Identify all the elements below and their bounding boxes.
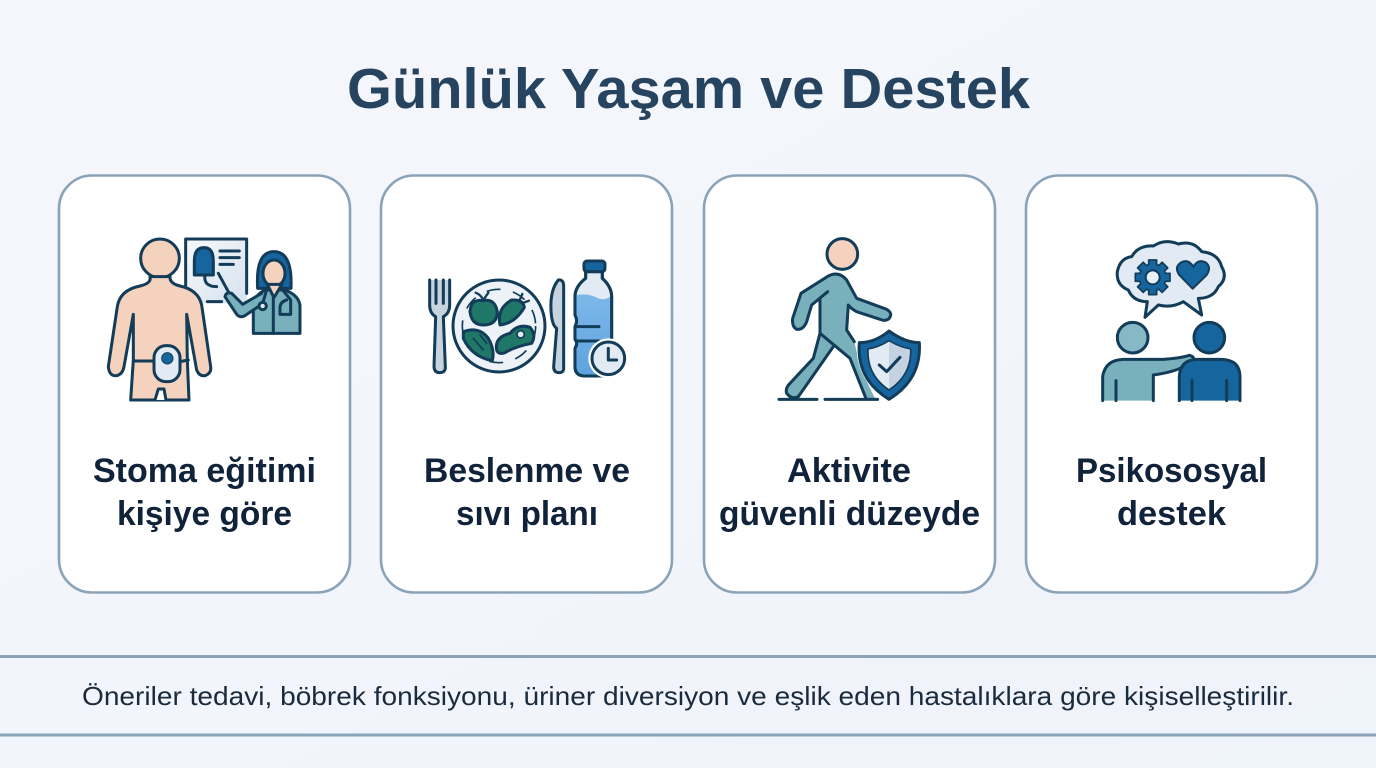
icon: patient with stoma pouch and doctor [108, 239, 300, 400]
panel: safe activity [704, 176, 995, 592]
heading: psychosocial support: destek [1117, 495, 1226, 533]
icon: walking person with shield [779, 239, 922, 402]
icon: two people with thought bubble [1103, 242, 1240, 401]
heading: nutrition and fluids: Beslenme ve [424, 452, 630, 490]
footer note: Öneriler tedavi, böbrek fonksiyonu, üriner diversiyon ve eşlik eden hastalıklara göre kişiselleştirilir. [82, 681, 1294, 711]
icon: plate, cutlery, water bottle and clock [430, 261, 628, 378]
panel: psychosocial support [1026, 176, 1317, 592]
heading: stoma education [93, 452, 316, 533]
panel: stoma education [59, 176, 350, 592]
title: Günlük Yaşam ve Destek [347, 57, 1030, 121]
heading: nutrition and fluids [424, 452, 630, 533]
heading: psychosocial support [1076, 452, 1267, 533]
heading: stoma education: Stoma eğitimi [93, 452, 316, 490]
heading: psychosocial support: Psikososyal [1076, 452, 1267, 490]
heading: stoma education: kişiye göre [117, 495, 292, 533]
heading: safe activity: güvenli düzeyde [719, 495, 980, 533]
heading: safe activity: Aktivite [787, 452, 911, 490]
heading: safe activity [719, 452, 980, 533]
heading: nutrition and fluids: sıvı planı [456, 495, 598, 533]
panel: nutrition and fluids [381, 176, 672, 592]
